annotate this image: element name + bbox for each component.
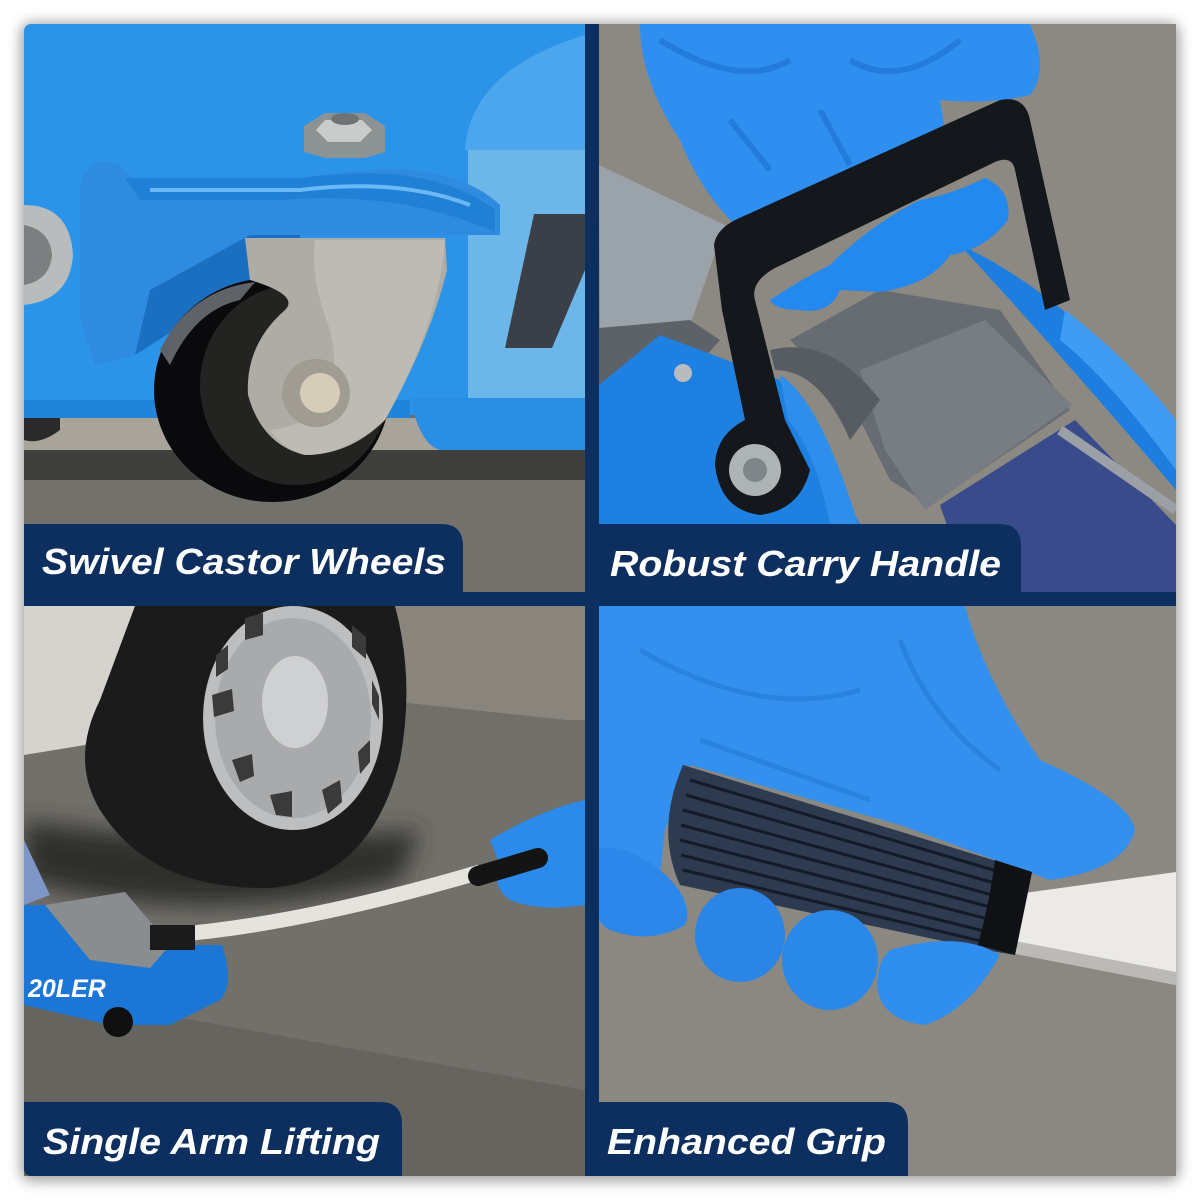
icon: jack	[24, 840, 228, 1037]
label: swivel castor wheels	[24, 524, 463, 592]
icon: lift handle	[170, 872, 480, 935]
label: single arm lifting	[24, 1102, 402, 1176]
jack body	[599, 335, 860, 524]
icon: white handle	[1000, 872, 1176, 985]
fingers	[599, 848, 687, 936]
icon: bolt	[304, 113, 385, 158]
icon: ribbed grip	[668, 765, 1032, 955]
panel: enhanced grip photo	[599, 606, 1176, 1176]
lift arm	[960, 245, 1176, 490]
label: enhanced grip	[585, 1102, 908, 1176]
label: enhanced grip: Enhanced Grip	[607, 1121, 886, 1162]
jack top plate	[599, 165, 725, 330]
panel: single arm lifting photo	[24, 606, 585, 1176]
label: robust carry handle	[585, 524, 1021, 606]
label plate	[940, 420, 1176, 592]
gloved hand	[490, 800, 585, 908]
divider: horizontal	[24, 592, 1176, 606]
label: single arm lifting: Single Arm Lifting	[43, 1121, 380, 1162]
fingers	[770, 178, 1009, 311]
icon: castor wheel	[154, 238, 447, 502]
gloved hand upper	[640, 24, 1040, 225]
icon: car wheel	[85, 606, 406, 888]
icon: carry handle	[714, 99, 1070, 515]
gloved hand over grip	[599, 606, 1135, 880]
label: swivel castor wheels: Swivel Castor Wheels	[42, 541, 446, 582]
saddle	[790, 290, 1070, 505]
label: robust carry handle: Robust Carry Handle	[610, 543, 1001, 584]
car body	[24, 606, 135, 755]
panel: swivel castor wheels photo	[24, 24, 585, 595]
divider: vertical	[585, 24, 599, 1176]
panel: robust carry handle photo	[599, 24, 1176, 592]
icon: jack: 20LER	[27, 975, 106, 1003]
